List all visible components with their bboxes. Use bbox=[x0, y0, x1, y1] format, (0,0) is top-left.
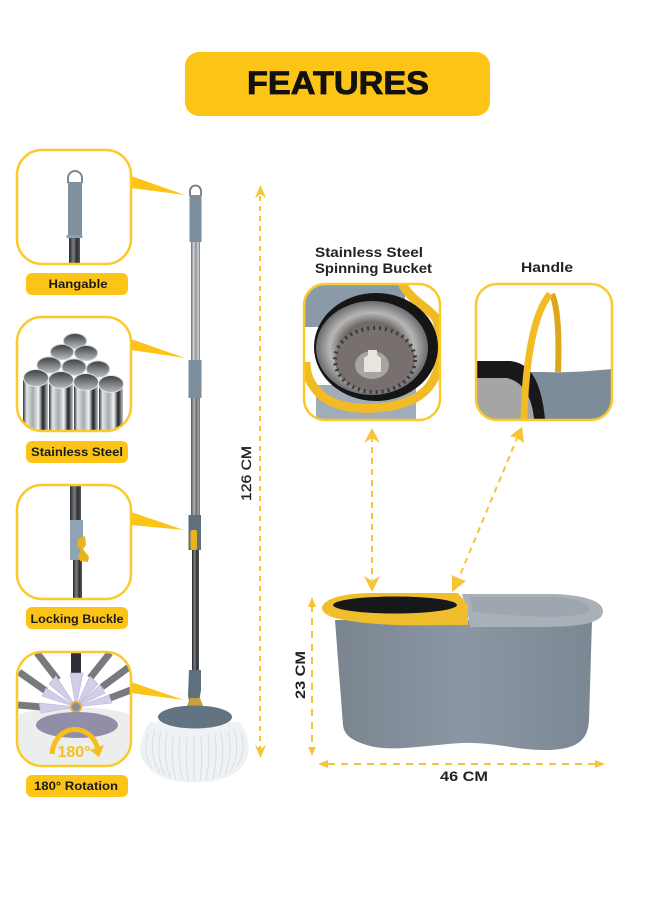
title: FEATURES bbox=[247, 65, 429, 101]
heading: spinning bucket: Stainless Steel bbox=[315, 244, 423, 260]
arrow: bucket link bbox=[364, 428, 380, 592]
label: hangable bbox=[26, 273, 128, 295]
label: locking buckle: Locking Buckle bbox=[30, 612, 124, 626]
callout pointer: rotation bbox=[131, 682, 184, 700]
label: hangable: Hangable bbox=[48, 277, 108, 291]
bucket bbox=[322, 593, 603, 750]
image: rotating head bbox=[18, 653, 131, 765]
grip bbox=[190, 195, 202, 242]
arrow: handle link bbox=[452, 427, 524, 592]
label: 180 rotation bbox=[26, 775, 128, 797]
callout pointer: locking buckle bbox=[131, 512, 184, 530]
dimension: 23 cm: 23 CM bbox=[292, 651, 308, 699]
panel: locking buckle bbox=[17, 485, 184, 629]
dimension: 126 cm: 126 CM bbox=[239, 446, 254, 501]
mop strands bbox=[140, 722, 249, 782]
bucket rim yellow bbox=[322, 593, 468, 625]
image: steel tubes bbox=[23, 334, 124, 436]
mop bbox=[140, 186, 249, 782]
panel: 180 rotation bbox=[17, 652, 184, 797]
dimension: 126 cm bbox=[239, 185, 266, 758]
image: bucket handle bbox=[477, 294, 612, 420]
mop handle hook bbox=[190, 186, 201, 196]
label: locking buckle bbox=[26, 607, 128, 629]
mop disc bbox=[158, 706, 232, 728]
lock collar bbox=[188, 515, 201, 550]
image: buckle bbox=[70, 486, 89, 600]
image: spinner basket bbox=[305, 283, 441, 419]
callout pointer: stainless steel bbox=[131, 339, 185, 358]
bucket rim right bbox=[462, 594, 603, 627]
image: rotating head: 180° bbox=[57, 744, 91, 761]
title bbox=[185, 52, 490, 116]
image: pole top bbox=[66, 171, 82, 264]
bucket body bbox=[335, 620, 592, 750]
spinner opening bbox=[333, 596, 457, 614]
label: stainless steel bbox=[26, 441, 128, 463]
heading: spinning bucket: Spinning Bucket bbox=[315, 260, 432, 276]
dimension: 23 cm bbox=[292, 597, 316, 756]
yellow buckle bbox=[190, 530, 197, 550]
lower sleeve bbox=[188, 670, 201, 708]
label: stainless steel: Stainless Steel bbox=[31, 445, 123, 459]
callout pointer: hangable bbox=[131, 176, 185, 195]
label: 180 rotation: 180° Rotation bbox=[34, 779, 118, 793]
panel: handle bbox=[476, 284, 612, 420]
upper pole bbox=[191, 242, 200, 360]
panel: stainless steel bbox=[17, 317, 185, 463]
lower pole bbox=[192, 550, 199, 671]
panel: hangable bbox=[17, 150, 185, 295]
middle collar bbox=[188, 360, 202, 398]
panel: spinning bucket bbox=[304, 283, 441, 420]
dimension: 46 cm bbox=[318, 760, 605, 784]
dimension: 46 cm: 46 CM bbox=[440, 768, 488, 784]
middle pole bbox=[191, 398, 200, 516]
heading: handle: Handle bbox=[521, 259, 573, 275]
